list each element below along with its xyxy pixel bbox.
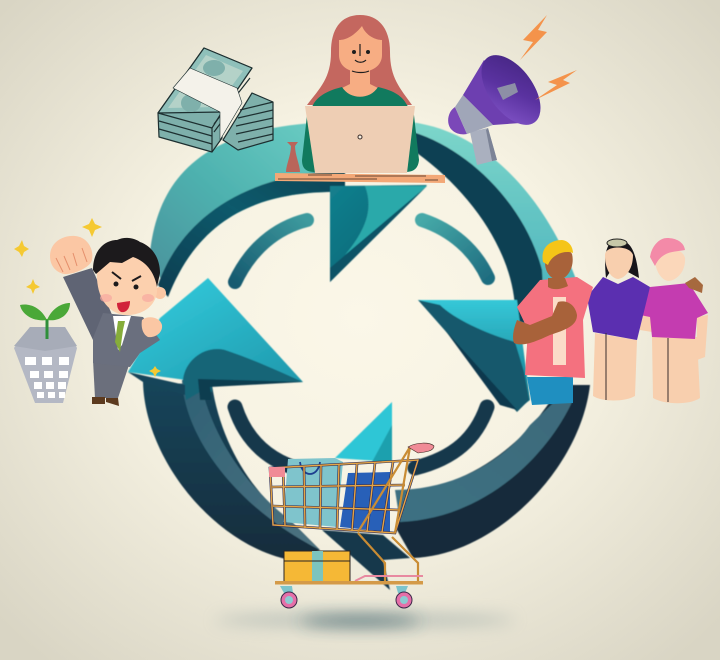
arc: top-right <box>410 122 580 330</box>
laptop <box>305 106 415 173</box>
facial features <box>100 272 154 312</box>
left friend <box>513 240 593 405</box>
tie <box>115 321 125 352</box>
rim <box>470 45 552 135</box>
fist lower <box>142 317 162 337</box>
cap <box>448 107 467 134</box>
right friend <box>640 238 708 403</box>
base tray <box>275 576 423 584</box>
handle <box>470 128 497 165</box>
face <box>97 248 157 315</box>
wheels <box>280 586 412 608</box>
middle friend <box>587 239 650 400</box>
illustration: woman at laptop <box>275 15 445 183</box>
icon: lightning bolts <box>520 15 577 100</box>
arc: bottom-right <box>395 385 590 558</box>
arc: bottom-left <box>143 380 320 560</box>
illustration: businessman <box>50 236 166 406</box>
driver <box>497 83 518 100</box>
cart basket <box>270 460 418 533</box>
shoes <box>92 397 119 406</box>
small arc: top-left <box>235 220 307 282</box>
ground shadow <box>215 613 515 627</box>
icon: megaphone <box>448 45 552 165</box>
paper band <box>173 68 242 140</box>
building <box>14 327 77 403</box>
light shopping bag <box>283 458 343 527</box>
neck <box>342 70 378 97</box>
vase <box>286 142 300 172</box>
raised arm <box>63 268 113 340</box>
windows <box>25 357 69 398</box>
desk <box>275 173 445 183</box>
dark shopping bag <box>340 472 390 532</box>
pink tag <box>269 467 285 477</box>
handle <box>408 443 434 453</box>
eyes and smile <box>352 44 369 72</box>
hair <box>307 15 412 105</box>
cycle ring with arrows <box>128 122 590 590</box>
jacket <box>93 313 160 367</box>
back stack <box>223 93 273 150</box>
small arc: bottom-left <box>235 407 295 468</box>
front stack <box>158 48 252 152</box>
ear <box>154 287 166 299</box>
bell outer <box>463 60 535 125</box>
fist raised <box>50 236 92 274</box>
arc: top-left <box>150 122 345 297</box>
gift box <box>284 551 350 582</box>
cart frame <box>358 447 418 583</box>
grey collar <box>455 95 493 134</box>
arrow head: right <box>418 300 530 412</box>
sprout <box>20 303 70 339</box>
arrow head: top <box>330 185 427 282</box>
shirt <box>113 316 131 350</box>
legs <box>93 360 130 398</box>
face <box>339 26 382 72</box>
small arc: bottom-right <box>415 407 487 468</box>
arrow head: bottom <box>322 402 410 590</box>
arrow head: left <box>128 278 303 400</box>
icon: stacks of money <box>158 48 273 152</box>
illustration: group of three friends <box>513 238 708 405</box>
sweater <box>302 87 419 172</box>
illustration: shopping cart <box>269 443 434 608</box>
small arc: top-right <box>422 220 488 278</box>
icon: building with sprout <box>14 303 77 403</box>
hair <box>93 238 160 287</box>
icon: sparkle stars <box>14 218 161 377</box>
